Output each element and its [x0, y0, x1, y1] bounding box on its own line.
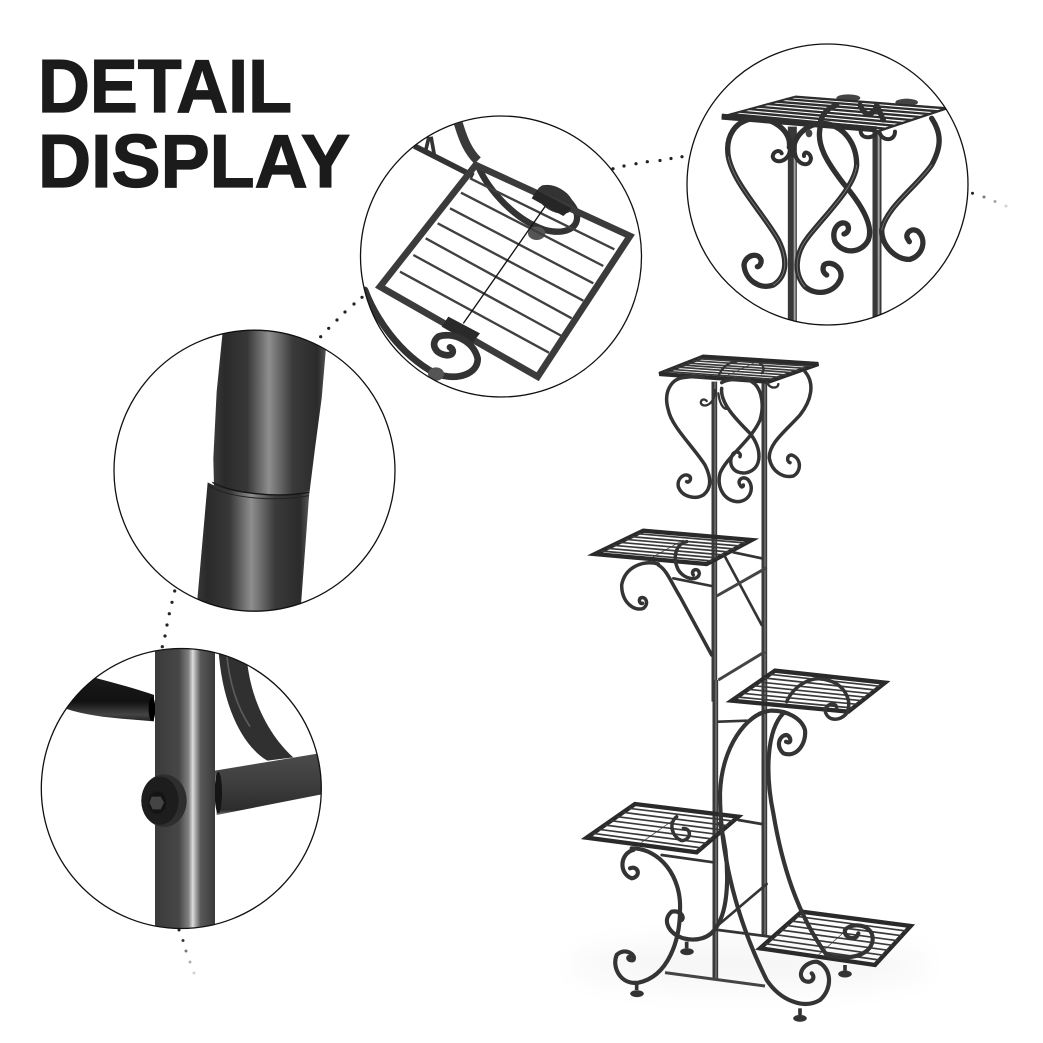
shelf 2: [595, 531, 752, 564]
left front scroll: [615, 848, 680, 983]
title: DISPLAY: [38, 119, 350, 203]
adjustable feet: [630, 942, 852, 1022]
main tall scrolls: [720, 711, 873, 1004]
shelf 3: [732, 671, 885, 719]
shelf 1: [659, 357, 818, 382]
title: DETAIL: [38, 44, 292, 128]
struts and base bars: [662, 721, 770, 986]
plant stand: [570, 357, 930, 1022]
dotted connector: circle 4 to circle 3: [161, 589, 176, 648]
detail circle: tube joint: [114, 325, 395, 618]
detail circle: shelf viewed from above: [360, 116, 642, 397]
lower half of stand: [587, 671, 911, 1022]
detail circle: top shelf and scrollwork: [687, 44, 968, 330]
floor shadow: [570, 941, 930, 989]
shelf 2 scrolls and braces: [622, 542, 767, 680]
shelf 1 scrolls: [667, 362, 811, 502]
dotted connector: circle 3 to circle 2: [319, 296, 364, 338]
dotted connector: circle 2 to circle 1: [611, 155, 684, 170]
detail circle: bolted tube connection: [41, 643, 323, 937]
shelf 4: [587, 804, 738, 852]
title: [38, 44, 350, 203]
large rear scroll: [667, 823, 727, 940]
dotted connector: fading right of circle 1: [971, 192, 1008, 208]
shelf 5: [760, 912, 911, 965]
upper half of stand: [595, 357, 818, 702]
dotted connector: fading below circle 4: [178, 928, 196, 974]
